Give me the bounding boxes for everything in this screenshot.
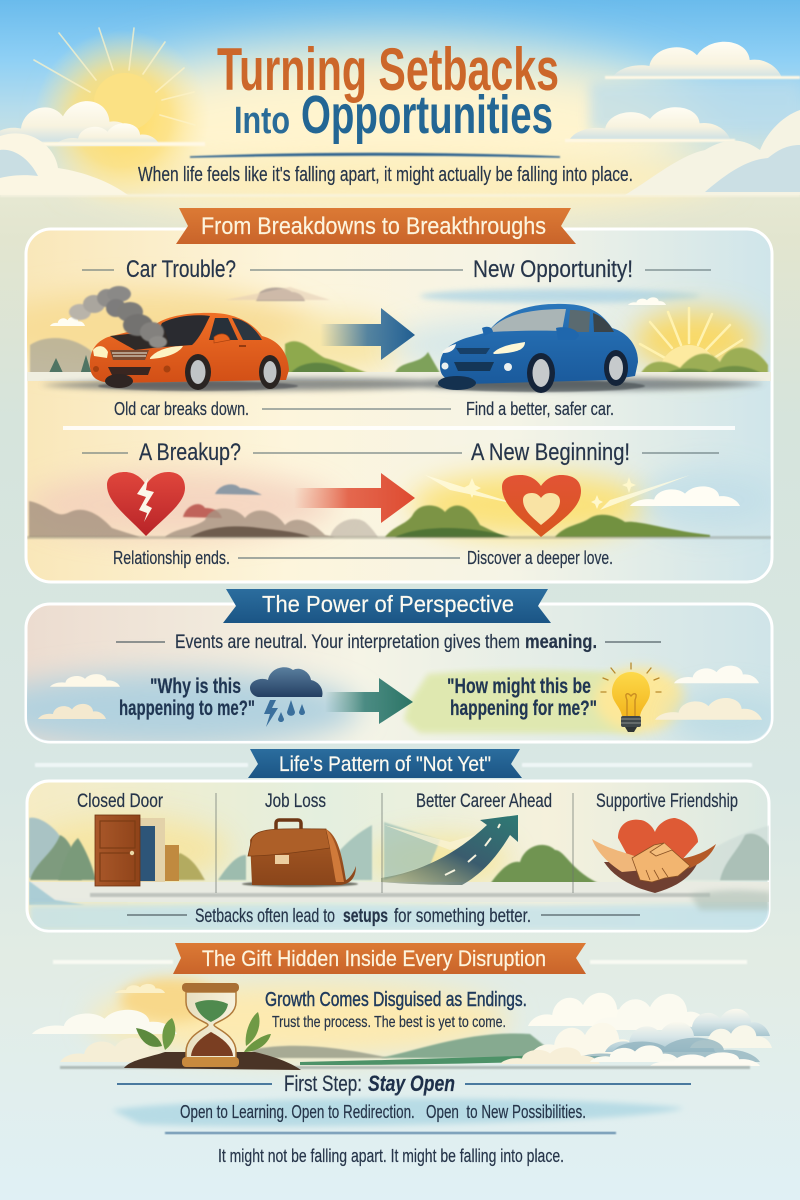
quote: why is this happening to me <box>119 675 255 720</box>
quote: how might this be happening for me: "How might this be <box>447 675 591 698</box>
scene: car trouble background <box>0 287 400 375</box>
subtitle: When life feels like it's falling apart, it might actually be falling into place. <box>138 164 633 186</box>
panel: from breakdowns to breakthroughs <box>0 229 780 582</box>
scene: hopeful right band <box>404 666 790 744</box>
headings: first scenario <box>82 256 711 283</box>
statement with lines: meaning. <box>525 632 597 653</box>
quote: why is this happening to me: "Why is this <box>150 675 241 698</box>
quote: how might this be happening for me <box>447 675 597 720</box>
road <box>27 372 771 391</box>
ribbon: from breakdowns to breakthroughs: From Breakdowns to Breakthroughs <box>201 213 546 240</box>
arrow: breakup to new beginning <box>294 473 415 523</box>
scene: landscape <box>29 818 771 931</box>
statement with lines: Events are neutral. Your interpretation gives them <box>175 632 520 653</box>
captions: first scenario: Old car breaks down. <box>114 399 249 419</box>
captions: second scenario: Relationship ends. <box>113 548 230 568</box>
quote: how might this be happening for me: happening for me?" <box>450 697 597 720</box>
caption with lines: for something better. <box>394 906 531 927</box>
icon: briefcase <box>242 820 358 887</box>
ribbon: life's pattern of not yet: Life's Pattern of "Not Yet" <box>279 753 491 776</box>
divider line <box>165 1132 616 1134</box>
icon: hearts and handshake <box>592 818 716 893</box>
icon: storm cloud <box>250 667 323 727</box>
caption with lines <box>127 906 640 927</box>
column: job loss <box>242 791 358 887</box>
growth statement <box>265 989 527 1031</box>
clouds: right <box>565 42 800 195</box>
icon: broken heart <box>107 472 185 536</box>
heading: first step: First Step: <box>284 1071 362 1096</box>
white streaks beside gift ribbon <box>53 960 747 964</box>
captions: second scenario: Discover a deeper love. <box>467 548 613 568</box>
ribbon: the power of perspective <box>223 589 551 623</box>
section: the gift hidden inside every disruption <box>32 978 772 1070</box>
icon: smoke <box>69 286 167 348</box>
title underline <box>190 154 560 157</box>
headings: second scenario: A Breakup? <box>139 439 241 466</box>
heading: first step <box>117 1071 691 1096</box>
icon: hourglass with plants <box>124 983 301 1070</box>
brush band: open to: Open to Learning. Open to Redirection. Open to New Possibilities. <box>180 1101 586 1122</box>
column: better career ahead <box>381 791 552 885</box>
icon: rising road <box>381 815 518 885</box>
icon: rising sun <box>640 308 742 375</box>
scene: new opportunity background <box>390 289 768 377</box>
ribbon: the gift hidden inside every disruption: The Gift Hidden Inside Every Disruption <box>202 946 546 971</box>
panel: life's pattern of not yet <box>27 781 771 931</box>
scene: stormy left band <box>0 672 360 748</box>
scene: new beginning background <box>385 468 780 537</box>
column: supportive friendship: Supportive Friendship <box>596 791 738 812</box>
icon: new blue car <box>435 304 645 393</box>
clouds: left <box>0 101 205 195</box>
ribbon: the power of perspective: The Power of Perspective <box>262 591 514 617</box>
captions: first scenario: Find a better, safer car. <box>466 399 614 419</box>
icon: mended heart <box>502 475 581 537</box>
title <box>217 36 559 145</box>
growth statement: Growth Comes Disguised as Endings. <box>265 989 527 1011</box>
captions: first scenario <box>114 399 614 419</box>
arrow: car trouble to opportunity <box>320 308 415 360</box>
headings: first scenario: Car Trouble? <box>126 256 236 283</box>
captions: second scenario <box>113 548 613 568</box>
caption with lines: Setbacks often lead to <box>195 906 335 927</box>
icon: broken-down orange car <box>69 286 298 391</box>
ribbon: from breakdowns to breakthroughs <box>176 208 576 244</box>
title: Turning Setbacks <box>217 36 559 103</box>
growth statement: Trust the process. The best is yet to come. <box>272 1014 506 1031</box>
headings: first scenario: New Opportunity! <box>473 256 633 283</box>
divider bar <box>63 426 735 430</box>
arrow: mindset shift <box>325 678 413 724</box>
ribbon: life's pattern of not yet <box>248 749 522 778</box>
white streaks beside ribbon <box>35 763 752 767</box>
column: job loss: Job Loss <box>265 791 326 812</box>
caption with lines: setups <box>343 906 388 927</box>
quote: why is this happening to me: happening to me?" <box>119 697 255 720</box>
closing line: It might not be falling apart. It might be falling into place. <box>218 1146 564 1166</box>
column: better career ahead: Better Career Ahead <box>416 791 552 812</box>
column: closed door <box>77 791 179 886</box>
title: Opportunities <box>301 85 553 145</box>
brush band: open to <box>112 1098 684 1126</box>
column: closed door: Closed Door <box>77 791 164 812</box>
column: supportive friendship <box>592 791 738 893</box>
headings: second scenario <box>82 439 719 466</box>
heading: first step: Stay Open <box>368 1071 455 1096</box>
icon: door <box>95 815 179 886</box>
panel: the power of perspective <box>0 604 790 748</box>
icon: light bulb <box>601 663 661 732</box>
scene: hills and clouds <box>32 978 772 1069</box>
dividers <box>216 793 573 893</box>
header: sky, sun and clouds <box>0 28 800 215</box>
icon: sun <box>34 28 210 206</box>
scene: breakup background <box>25 471 378 539</box>
title: Into <box>234 100 290 142</box>
headings: second scenario: A New Beginning! <box>471 439 630 466</box>
